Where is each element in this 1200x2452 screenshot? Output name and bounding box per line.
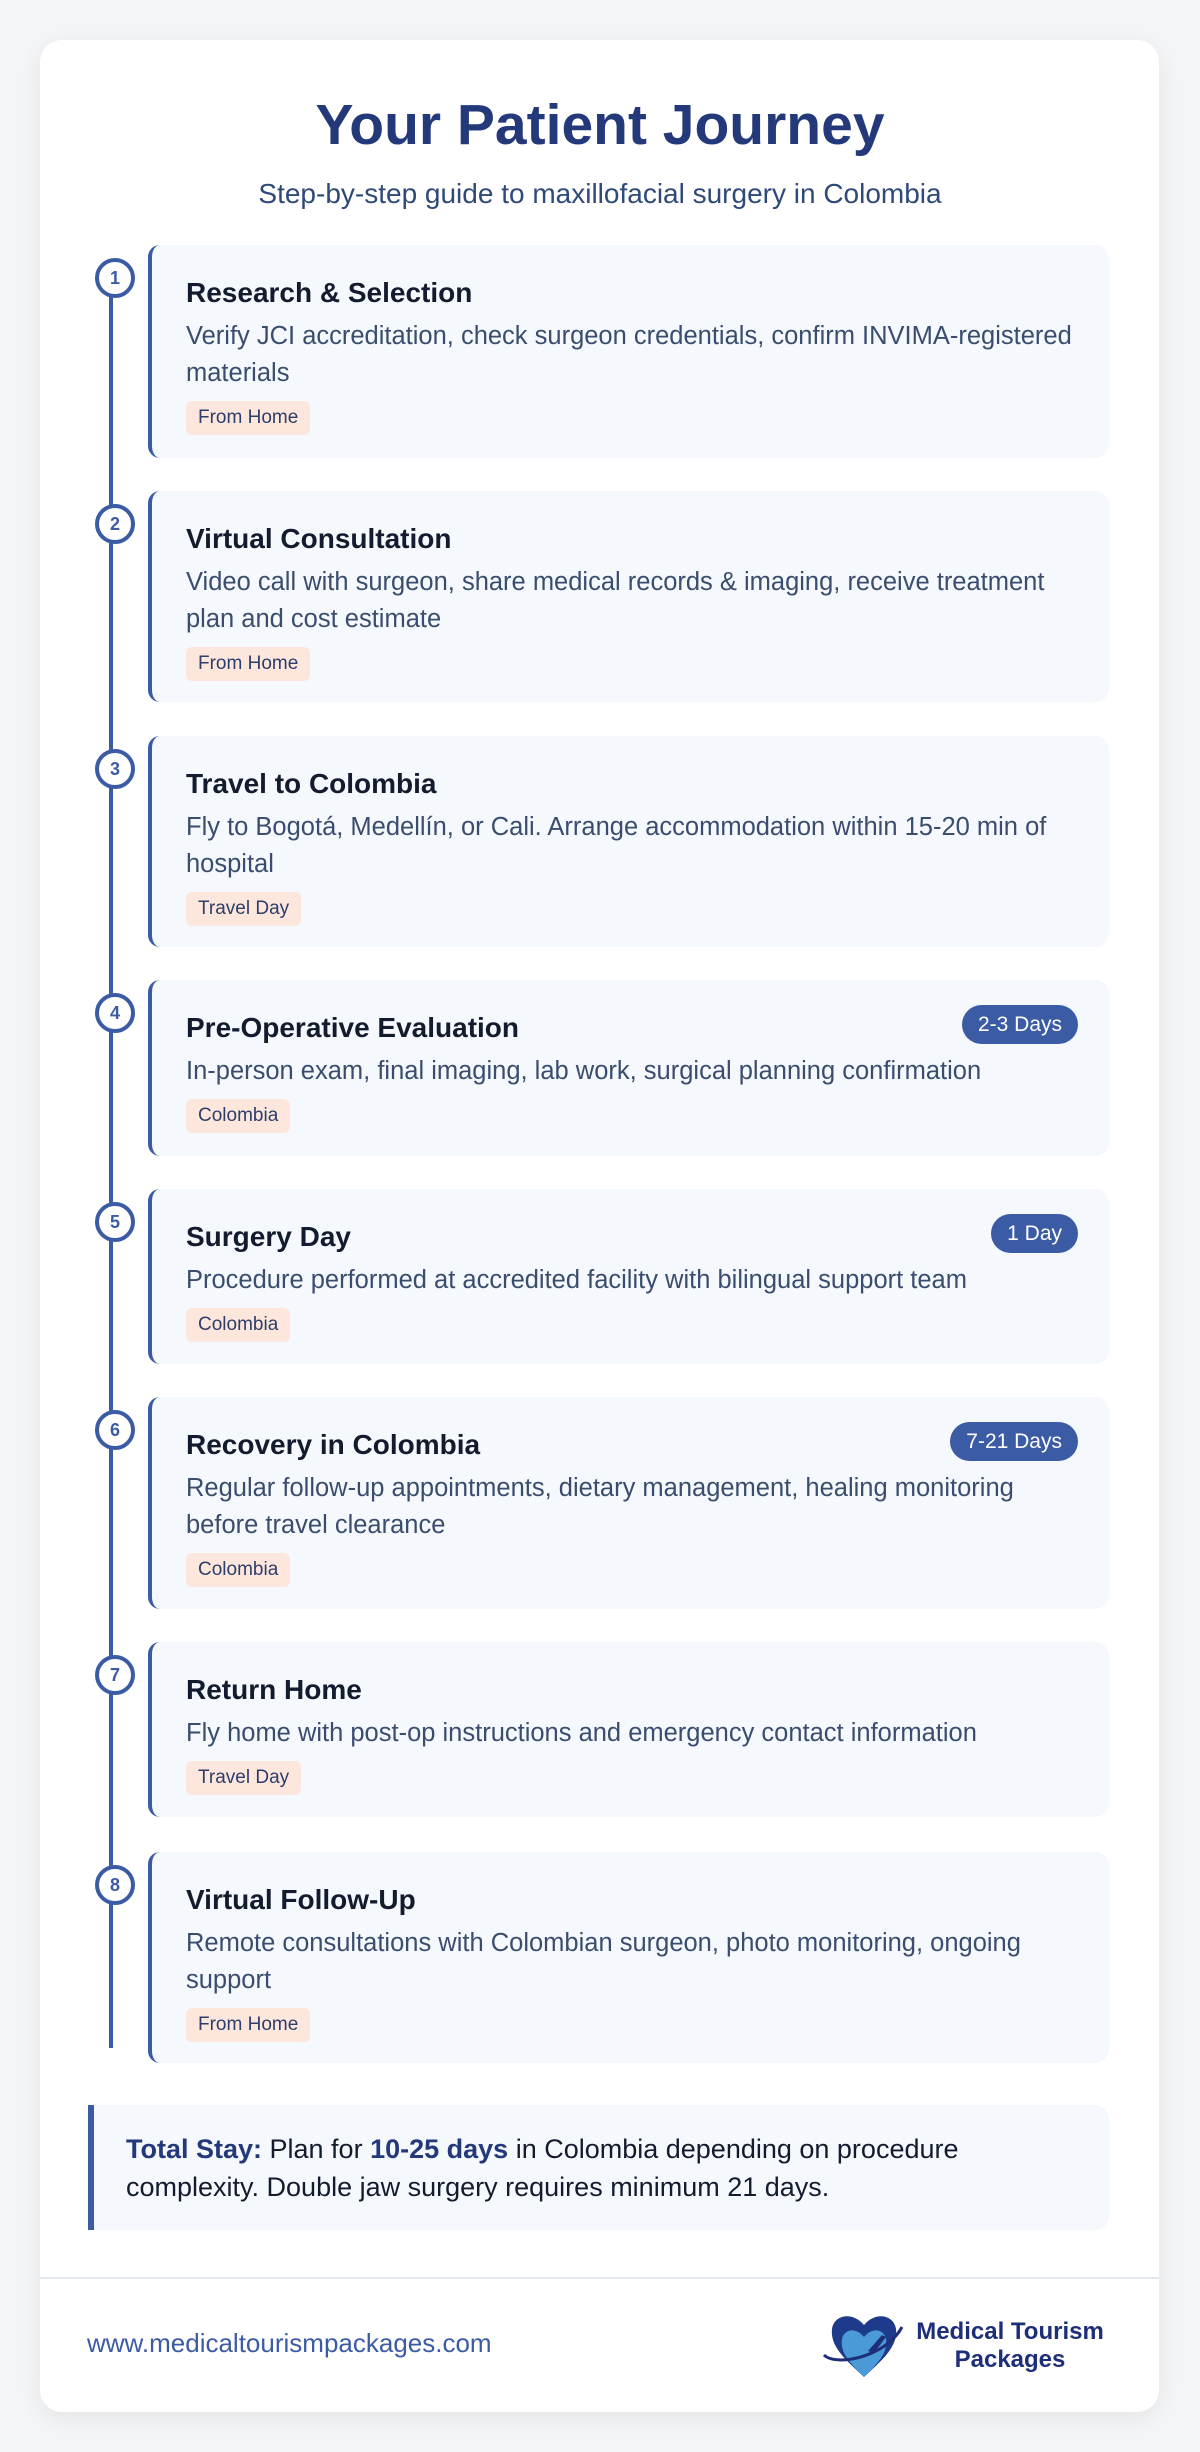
text: 5 [110,1212,120,1232]
text: 8 [110,1875,120,1895]
step 2: From Home [198,653,298,674]
text: 4 [110,1003,120,1023]
step 8: Remote consultations with Colombian surgeon, photo monitoring, ongoing [186,1929,1021,1957]
step 1: Research & Selection [186,277,472,308]
step 2: plan and cost estimate [186,605,441,633]
step 7: Return Home [186,1674,362,1705]
timeline line [109,278,113,2048]
logo: Medical Tourism [916,2318,1104,2345]
step 7: Travel Day [198,1767,289,1788]
total stay callout [88,2105,1109,2230]
step 2 [148,491,1109,702]
footer url: www.medicaltourismpackages.com [87,2328,492,2358]
step 1: materials [186,359,289,387]
step 4: In-person exam, final imaging, lab work, surgical planning confirmation [186,1057,981,1085]
step 8 [148,1852,1109,2063]
step 6: Recovery in Colombia [186,1429,480,1460]
step 5: 1 Day [1007,1222,1062,1245]
step 1: From Home [198,407,298,428]
step 5: Procedure performed at accredited facility with bilingual support team [186,1266,967,1294]
step 4: Pre-Operative Evaluation [186,1012,519,1043]
step 6: 7-21 Days [966,1430,1062,1453]
step 3: Travel to Colombia [186,768,436,799]
logo [823,2316,1104,2377]
subtitle: Step-by-step guide to maxillofacial surgery in Colombia [258,178,942,209]
step 6: Regular follow-up appointments, dietary management, healing monitoring [186,1474,1014,1502]
total stay callout: complexity. Double jaw surgery requires minimum 21 days. [126,2172,829,2202]
text: 6 [110,1420,120,1440]
step 6: Colombia [198,1559,278,1580]
step 3: Travel Day [198,898,289,919]
step 6: before travel clearance [186,1511,445,1539]
step 8: From Home [198,2014,298,2035]
step 8: Virtual Follow-Up [186,1884,416,1915]
title: Your Patient Journey [315,93,885,157]
total stay callout: Total Stay: Plan for 10-25 days in Colombia depending on procedure [126,2134,958,2164]
step 6 [148,1397,1109,1609]
step 3 [148,736,1109,947]
step 5: Colombia [198,1314,278,1335]
text: 3 [110,759,120,779]
step 4 [148,980,1109,1156]
step 1: Verify JCI accreditation, check surgeon credentials, confirm INVIMA-registered [186,322,1072,350]
step 2: Virtual Consultation [186,523,452,554]
logo: Packages [955,2346,1065,2373]
step 1 [148,245,1109,458]
text: 2 [110,514,120,534]
step 3: hospital [186,850,274,878]
step 4: Colombia [198,1105,278,1126]
step 8: support [186,1966,271,1994]
text: 7 [110,1665,120,1685]
step 3: Fly to Bogotá, Medellín, or Cali. Arrange accommodation within 15-20 min of [186,813,1046,841]
step 2: Video call with surgeon, share medical records & imaging, receive treatment [186,568,1044,596]
step 5: Surgery Day [186,1221,351,1252]
step 4: 2-3 Days [978,1013,1062,1036]
step 7: Fly home with post-op instructions and emergency contact information [186,1719,977,1747]
step 5 [148,1189,1109,1364]
text: 1 [110,268,120,288]
step 7 [148,1642,1109,1817]
